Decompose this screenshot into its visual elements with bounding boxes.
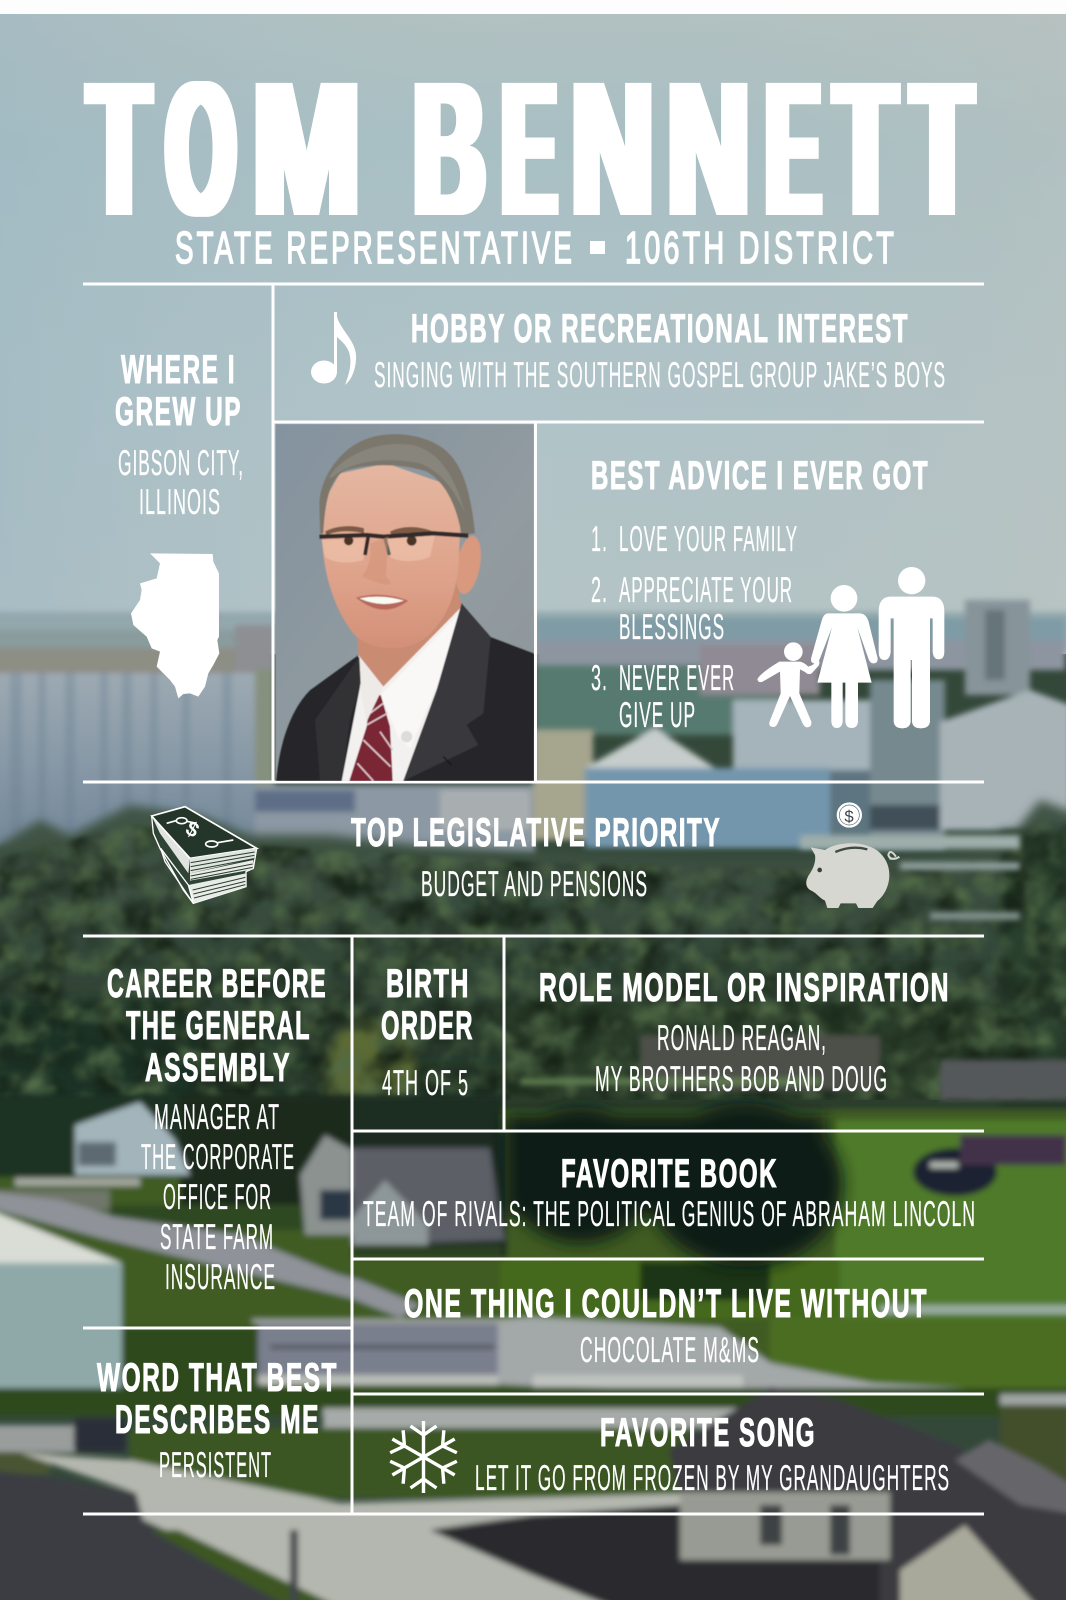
white strip at top <box>0 0 1066 14</box>
title: O <box>166 41 235 256</box>
heading: career: ASSEMBLY <box>145 1046 291 1090</box>
text: role model answer: RONALD REAGAN, <box>657 1017 827 1058</box>
panel: birth order: 4TH OF 5 <box>382 1062 469 1103</box>
text: career answer: STATE FARM <box>160 1216 274 1257</box>
icon: Illinois map <box>131 553 219 698</box>
text: hometown <box>118 442 244 522</box>
text: advice list: BLESSINGS <box>619 606 725 647</box>
portrait photo <box>275 424 534 781</box>
heading: favorite book: FAVORITE BOOK <box>561 1152 778 1196</box>
panel: favorite book <box>363 1152 976 1234</box>
heading: birth order <box>381 962 474 1048</box>
text: hometown: ILLINOIS <box>139 481 221 522</box>
heading: favorite song: FAVORITE SONG <box>600 1411 816 1455</box>
heading: birth order: BIRTH <box>386 962 470 1006</box>
heading: word: WORD THAT BEST <box>97 1356 338 1400</box>
text: advice list: 3. <box>591 657 608 698</box>
icon: family <box>757 567 944 728</box>
subtitle: STATE REPRESENTATIVE <box>175 222 575 273</box>
icon: stack of money: $ <box>182 817 203 842</box>
title: T <box>912 41 972 256</box>
panel: word that best describes me <box>97 1356 338 1485</box>
panel: hobby <box>311 307 946 395</box>
grid lines <box>83 284 984 1514</box>
title: N <box>572 41 653 256</box>
panel: top legislative priority: BUDGET AND PENSIONS <box>421 863 648 904</box>
heading: word <box>97 1356 338 1442</box>
panel: favorite song <box>386 1411 950 1498</box>
title: B <box>414 41 485 256</box>
panel: career <box>107 962 327 1297</box>
heading: top legislative priority: TOP LEGISLATIVE PRIORITY <box>351 811 721 855</box>
text: GIBSON CITY, <box>118 442 244 483</box>
panel: where I grew up <box>115 348 244 698</box>
panel: word that best describes me: PERSISTENT <box>159 1444 272 1485</box>
icon: stack of money <box>152 807 257 903</box>
panel: best advice: LOVE YOUR FAMILY <box>619 518 798 559</box>
heading: where I grew up: GREW UP <box>115 390 242 434</box>
panel: one thing <box>404 1282 928 1370</box>
text: advice list: GIVE UP <box>619 694 696 735</box>
text: career answer: OFFICE FOR <box>163 1176 272 1217</box>
panel: best advice: APPRECIATE YOUR <box>619 569 793 610</box>
panel: role model <box>539 966 950 1099</box>
text: advice list: 1. <box>591 518 608 559</box>
heading: career: CAREER BEFORE <box>107 962 327 1006</box>
icon: piggy bank and coin <box>806 802 899 908</box>
title: M <box>253 41 360 256</box>
title: T <box>835 41 896 256</box>
panel: best advice <box>591 454 944 735</box>
heading: career <box>107 962 327 1090</box>
text: career answer: INSURANCE <box>165 1256 276 1297</box>
text: advice list <box>591 518 798 735</box>
title: E <box>766 41 820 256</box>
text: advice list: 2. <box>591 569 608 610</box>
heading: word: DESCRIBES ME <box>115 1398 320 1442</box>
text: career answer: MANAGER AT <box>154 1096 280 1137</box>
icon: piggy bank and coin: $ <box>844 807 854 826</box>
title: T <box>89 41 150 256</box>
text: advice list: NEVER EVER <box>619 657 735 698</box>
text: career answer <box>141 1096 295 1297</box>
panel: top legislative priority <box>152 802 899 908</box>
heading: birth order: ORDER <box>381 1004 474 1048</box>
panel: birth order <box>381 962 474 1103</box>
subtitle: 106TH DISTRICT <box>625 222 897 273</box>
text: role model answer <box>595 1017 888 1099</box>
icon: music note <box>311 312 356 385</box>
heading: where I grew up: WHERE I <box>121 348 236 392</box>
icon: snowflake <box>386 1421 461 1493</box>
heading: where I grew up <box>115 348 242 434</box>
title: E <box>502 41 556 256</box>
heading: career: THE GENERAL <box>126 1004 311 1048</box>
panel: career: THE CORPORATE <box>141 1136 295 1177</box>
panel: one thing: CHOCOLATE M&MS <box>580 1329 760 1370</box>
title: N <box>668 41 749 256</box>
